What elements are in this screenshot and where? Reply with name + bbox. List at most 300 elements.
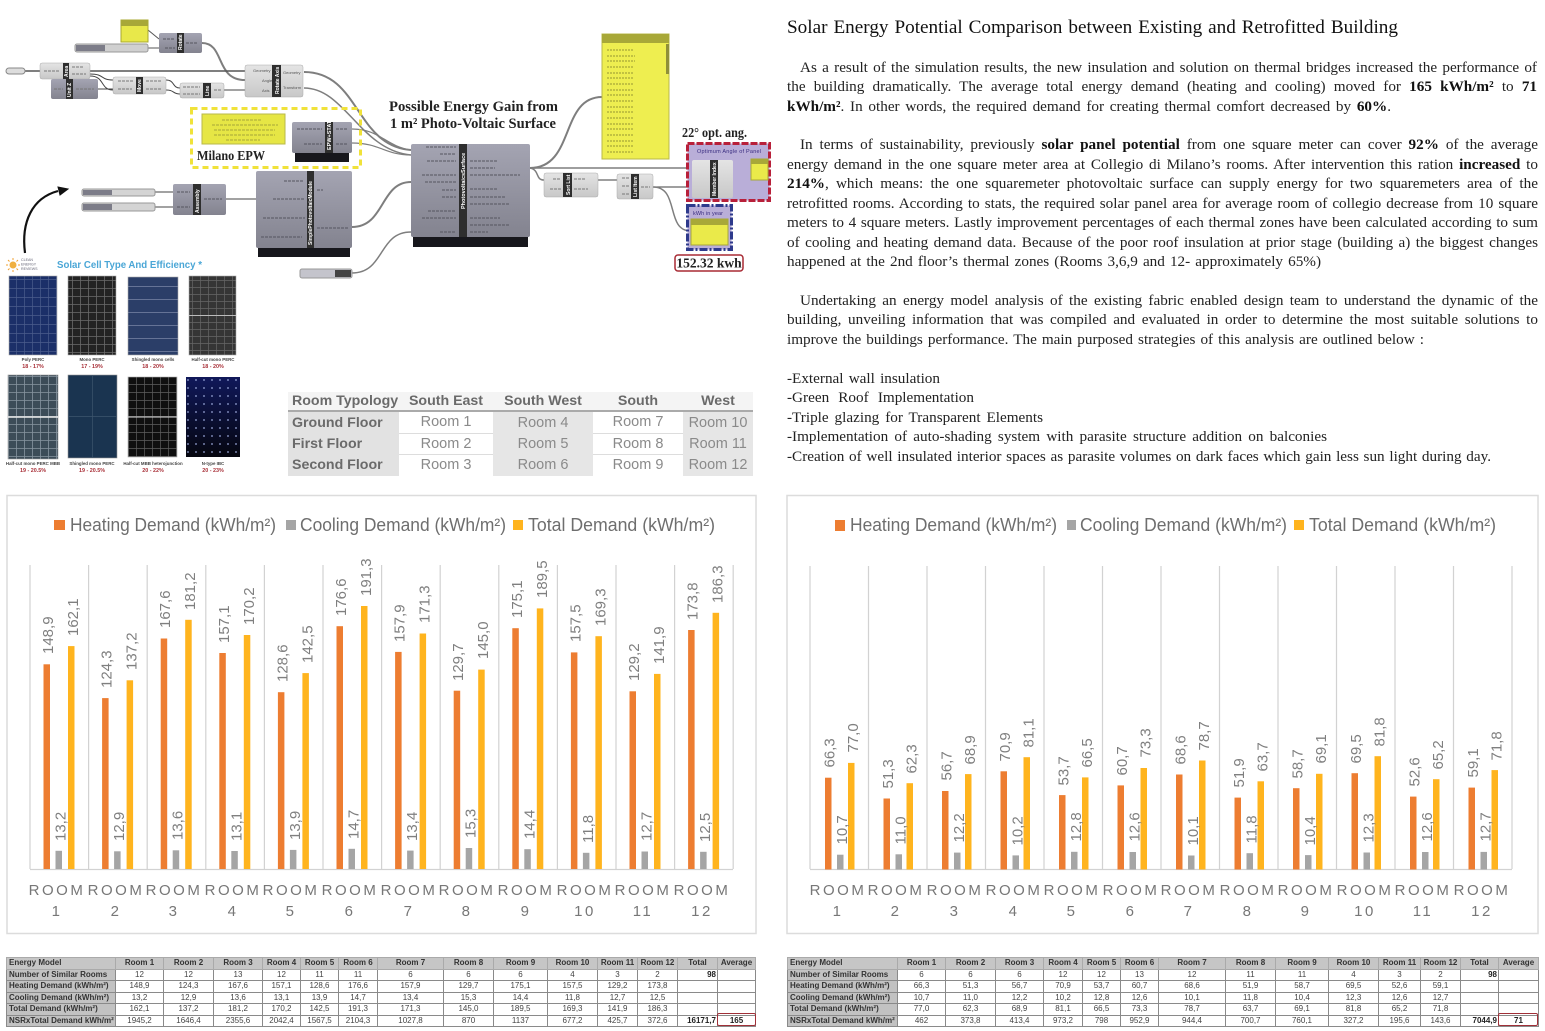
- room typology table: Room Typology: [292, 393, 398, 409]
- bar chart rooms: 162,1: [65, 598, 82, 636]
- table: retrofitted building energy model: 373,8: [960, 1016, 981, 1025]
- room typology table: Room 10: [689, 414, 747, 430]
- bar chart rooms: 175,1: [509, 580, 526, 618]
- bar chart rooms: 70,9: [997, 732, 1014, 762]
- bar chart rooms: 10,1: [1185, 816, 1202, 846]
- room typology table: Room 1: [421, 414, 471, 430]
- bar chart rooms: 12,6: [1419, 812, 1436, 842]
- table: retrofitted building energy model: 71,8: [1433, 1004, 1448, 1013]
- bar chart rooms: 157,5: [567, 604, 584, 642]
- table: retrofitted building energy model: 12,8: [1094, 993, 1109, 1002]
- bar chart rooms: 11,8: [1244, 815, 1260, 844]
- table: existing building energy model: 11,8: [565, 993, 580, 1002]
- bar chart rooms: 148,9: [40, 616, 57, 654]
- table: existing building energy model: 165: [730, 1016, 743, 1025]
- table: retrofitted building energy model: 69,1: [1294, 1004, 1310, 1013]
- table: existing building energy model: 372,6: [647, 1016, 668, 1025]
- logo: clean energy reviews: ENERGY: [21, 262, 37, 266]
- bar chart rooms: 12,3: [1360, 813, 1378, 842]
- table: retrofitted building energy model: Room 9: [1287, 958, 1317, 967]
- room axis labels: ROOM: [146, 882, 202, 899]
- component: sort and list item: Sort List: [566, 174, 572, 195]
- callout: 152.32 kwh: 152.32 kwh: [676, 256, 742, 270]
- table: existing building energy model: 124,3: [178, 981, 199, 990]
- table: retrofitted building energy model: 413,4: [1009, 1016, 1030, 1025]
- table: existing building energy model: 2042,4: [269, 1016, 294, 1025]
- bar chart rooms: 12,2: [951, 813, 968, 842]
- table: existing building energy model: 137,2: [178, 1004, 199, 1013]
- text block: solar energy comparison: 214%, which means: the one squaremeter photovoltaic surface can supply energy for two squaremeters area of the: [787, 175, 1538, 192]
- group: Milano EPW: EPW+STAT: [327, 120, 333, 150]
- logo: clean energy reviews: [6, 258, 38, 272]
- table: existing building energy model: 13,4: [403, 993, 418, 1002]
- bar chart rooms: [822, 717, 1506, 870]
- room axis labels: 4: [228, 903, 238, 920]
- room axis labels: 7: [1184, 903, 1194, 920]
- bar chart rooms: 173,8: [685, 582, 702, 620]
- group: optimum angle of panel: Optimum Angle of Panel: [697, 149, 761, 155]
- table: retrofitted building energy model: 68,6: [1184, 981, 1200, 990]
- room axis labels: 4: [1009, 903, 1019, 920]
- component: photovoltaic module: [256, 171, 352, 278]
- chart legend: Heating Demand (kWh/m²): [70, 515, 276, 535]
- bar chart rooms: 12,8: [1068, 812, 1085, 842]
- highlight: average 71: [1498, 1013, 1538, 1026]
- table: retrofitted building energy model: 51,9: [1243, 981, 1258, 990]
- table: existing building energy model: 148,9: [129, 981, 150, 990]
- table: existing building energy model: 1945,2: [127, 1016, 152, 1025]
- table: existing building energy model: 13,6: [230, 993, 246, 1002]
- table: retrofitted building energy model: 10,1: [1184, 993, 1200, 1002]
- table: existing building energy model: 128,6: [309, 981, 330, 990]
- bar chart rooms: 12,6: [1126, 812, 1144, 842]
- table: retrofitted building energy model: 195,6: [1389, 1016, 1410, 1025]
- room axis labels: 10: [1354, 903, 1376, 920]
- solar panels grid: 17 - 19%: [81, 364, 103, 370]
- bar chart rooms: 51,9: [1231, 758, 1248, 788]
- chart grid lines: [810, 566, 1512, 870]
- text block: solar energy comparison: [787, 17, 1538, 465]
- table: existing building energy model: 14,4: [513, 993, 528, 1002]
- bar chart rooms: 71,8: [1488, 731, 1506, 760]
- component: sort and list item: [544, 173, 653, 199]
- component: sliders and assembly: [82, 184, 226, 215]
- table: retrofitted building energy model: Room 1: [907, 958, 936, 967]
- room axis labels: 5: [1067, 903, 1077, 920]
- group: Milano EPW: [192, 108, 360, 168]
- bar chart rooms: 189,5: [534, 560, 551, 598]
- table: existing building energy model: 145,0: [458, 1004, 479, 1013]
- table: retrofitted building energy model: Room 7: [1177, 958, 1207, 967]
- bar chart rooms: 13,2: [52, 812, 70, 841]
- room axis labels: 9: [521, 903, 531, 920]
- room axis labels: 2: [111, 903, 121, 920]
- solar panels grid: 19 - 20.5%: [20, 468, 46, 474]
- text block: solar energy comparison: -Green Roof Implementation: [787, 389, 974, 406]
- table: retrofitted building energy model: 62,3: [963, 1004, 978, 1013]
- table: retrofitted building energy model: Room 5: [1087, 958, 1116, 967]
- room typology table: Room 8: [613, 436, 663, 452]
- table: retrofitted building energy model: Room 2: [956, 958, 985, 967]
- table: existing building energy model: 176,6: [348, 981, 368, 990]
- table: retrofitted building energy model: 65,2: [1392, 1004, 1407, 1013]
- table: existing building energy model: 1137: [512, 1016, 529, 1025]
- table: existing building energy model: 186,3: [647, 1004, 668, 1013]
- table: existing building energy model: 189,5: [510, 1004, 531, 1013]
- table: retrofitted building energy model: 11,0: [963, 993, 978, 1002]
- table: retrofitted building energy model: Average: [1503, 958, 1534, 967]
- bar chart rooms: 65,2: [1430, 740, 1447, 770]
- table: retrofitted building energy model: 63,7: [1243, 1004, 1258, 1013]
- text block: solar energy comparison: meters to 4 square meters. Lastly improvement percentages of each thermal zones have been calculated according to sum: [787, 214, 1538, 231]
- table: retrofitted building energy model: 4: [1351, 970, 1356, 979]
- table: retrofitted building energy model: 7044,9: [1473, 1016, 1497, 1025]
- room axis labels: ROOM: [205, 882, 261, 899]
- room axis labels: 9: [1301, 903, 1311, 920]
- strategies list: [787, 370, 1491, 465]
- table: existing building energy model: Number of Similar Rooms: [9, 970, 107, 979]
- heading: solar cell type: Solar Cell Type And Efficiency *: [57, 259, 203, 271]
- heading: Solar Energy Potential Comparison between Existing and Retrofitted Building: [787, 17, 1398, 38]
- paragraph 1: [787, 59, 1537, 115]
- component: panel and slider top: [75, 20, 202, 53]
- bar chart rooms: 181,2: [182, 572, 199, 610]
- heading: possible energy gain: Possible Energy Gain from: [389, 99, 558, 115]
- room axis labels: ROOM: [322, 882, 378, 899]
- room axis labels: ROOM: [29, 882, 85, 899]
- logo: clean energy reviews: CLEAN: [21, 258, 33, 262]
- table: existing building energy model: Room 12: [641, 958, 674, 967]
- table: existing building energy model: 870: [462, 1016, 475, 1025]
- room typology table: Second Floor: [292, 457, 383, 473]
- chart legend: Total Demand (kWh/m²): [528, 515, 715, 535]
- table: retrofitted building energy model: 12,6: [1132, 993, 1147, 1002]
- group: optimum angle of panel: [682, 126, 770, 200]
- table: retrofitted building energy model: 69,5: [1346, 981, 1361, 990]
- room axis labels: 12: [691, 903, 713, 920]
- room axis labels: ROOM: [674, 882, 730, 899]
- table: retrofitted building energy model: 6: [919, 970, 924, 979]
- bar chart rooms: 124,3: [99, 650, 116, 688]
- room axis labels: 10: [574, 903, 596, 920]
- arrow: [24, 187, 68, 253]
- bar chart rooms: 13,1: [228, 812, 245, 841]
- table: existing building energy model: Room 3: [223, 958, 253, 967]
- table: retrofitted building energy model: Cooling Demand (kWh/m²): [790, 993, 890, 1002]
- table: existing building energy model: 12,9: [181, 993, 196, 1002]
- room typology table: Room 12: [689, 457, 747, 473]
- table: retrofitted building energy model: 798: [1095, 1016, 1108, 1025]
- table: retrofitted building energy model: 59,1: [1433, 981, 1448, 990]
- room typology table: South East: [409, 393, 483, 409]
- table: existing building energy model: 157,9: [400, 981, 421, 990]
- table: retrofitted building energy model: Room 10: [1337, 958, 1370, 967]
- text block: solar energy comparison: -Triple glazing for Transparent Elements: [787, 409, 1043, 426]
- text block: solar energy comparison: -Creation of well insulated interior spaces as parasite volumes on dark faces which gain less sun light during day.: [787, 448, 1491, 465]
- bar chart rooms: 129,2: [626, 643, 643, 681]
- bar chart rooms: 14,4: [521, 810, 538, 839]
- table: retrofitted building energy model: 12: [1097, 970, 1106, 979]
- table: existing building energy model: 162,1: [129, 1004, 150, 1013]
- chart grid lines: [30, 565, 733, 870]
- panel: retrofitted building chart: [787, 496, 1538, 934]
- solar panels grid: Half-cut mono PERC MBB: [6, 461, 60, 466]
- table: retrofitted building energy model: 81,1: [1055, 1004, 1071, 1013]
- table: retrofitted building energy model: [787, 957, 1539, 1027]
- table: retrofitted building energy model: 11,8: [1243, 993, 1258, 1002]
- room axis labels: ROOM: [381, 882, 437, 899]
- table: existing building energy model: Room 10: [556, 958, 589, 967]
- table: retrofitted building energy model: 58,7: [1294, 981, 1310, 990]
- table: existing building energy model: 11: [354, 970, 362, 979]
- table: existing building energy model: 13,9: [312, 993, 327, 1002]
- solar panels grid: Half-cut MBB heterojunction: [123, 461, 183, 466]
- table: retrofitted building energy model: Room 6: [1125, 958, 1154, 967]
- table: existing building energy model: Room 5: [305, 958, 334, 967]
- table: existing building energy model: Room 4: [267, 958, 296, 967]
- table: retrofitted building energy model: 60,7: [1132, 981, 1147, 990]
- room axis labels: 11: [633, 903, 653, 920]
- room axis labels: ROOM: [1395, 882, 1451, 899]
- table: retrofitted building energy model: 66,3: [914, 981, 929, 990]
- solar panels grid: Shingled mono cells: [132, 357, 175, 362]
- table: existing building energy model: 11: [315, 970, 324, 979]
- chart legend: Total Demand (kWh/m²): [1309, 515, 1496, 535]
- room typology table: South West: [504, 393, 582, 409]
- solar panels grid: 18 - 20%: [142, 364, 164, 370]
- highlight: average 165: [717, 1013, 756, 1026]
- table: retrofitted building energy model: 2: [1438, 970, 1443, 979]
- table: retrofitted building energy model: Energy Model: [790, 958, 842, 967]
- bar chart rooms: 10,4: [1302, 816, 1319, 846]
- bar chart rooms: 68,9: [962, 735, 979, 764]
- table: retrofitted building energy model: 143,6: [1430, 1016, 1451, 1025]
- bar chart rooms: 171,3: [417, 585, 434, 623]
- bar chart rooms: 167,6: [157, 590, 174, 628]
- table: retrofitted building energy model: 327,2: [1343, 1016, 1364, 1025]
- bar chart rooms: 73,3: [1138, 728, 1154, 758]
- table: existing building energy model: Cooling Demand (kWh/m²): [9, 993, 109, 1002]
- table: existing building energy model: 13,1: [274, 993, 289, 1002]
- bar chart rooms: 157,9: [392, 604, 409, 642]
- table: retrofitted building energy model: 68,9: [1012, 1004, 1027, 1013]
- room typology table: Room 2: [421, 436, 471, 452]
- component: sliders and assembly: Assembly: [195, 189, 201, 213]
- table: retrofitted building energy model: Total Demand (kWh/m²): [790, 1004, 879, 1013]
- table: existing building energy model: 1027,8: [398, 1016, 423, 1025]
- component: area, unit and move chain: Line: [205, 86, 211, 96]
- text block: solar energy comparison: -External wall insulation: [787, 370, 940, 387]
- solar panels grid: 19 - 20.5%: [79, 468, 105, 474]
- component: area, unit and move chain: Rotate Axis: [275, 66, 281, 94]
- table: retrofitted building energy model: 81,8: [1346, 1004, 1361, 1013]
- room axis labels: 5: [286, 903, 296, 920]
- component: photovoltaic module: SimplePhotovoltaicModule: [308, 181, 314, 245]
- table: existing building energy model: 6: [518, 970, 523, 979]
- table: existing building energy model: Average: [721, 958, 752, 967]
- bar chart rooms: 170,2: [241, 587, 258, 625]
- room axis labels: ROOM: [1278, 882, 1334, 899]
- table: retrofitted building energy model: 12,7: [1433, 993, 1448, 1002]
- table: retrofitted building energy model: Total: [1470, 958, 1489, 967]
- table: existing building energy model: Energy Model: [9, 958, 61, 967]
- bar chart rooms: 78,7: [1196, 721, 1213, 750]
- room axis labels: ROOM: [615, 882, 671, 899]
- bar chart rooms: 51,3: [880, 759, 897, 788]
- text block: solar energy comparison: Undertaking an energy model analysis of the existing fabric enabled design team to understand the dynamic of the: [800, 292, 1538, 309]
- bar chart rooms: 10,7: [834, 815, 851, 844]
- table: existing building energy model: Room 1: [125, 958, 154, 967]
- bar chart rooms: 137,2: [124, 632, 141, 670]
- room axis labels: 2: [891, 903, 901, 920]
- logo: clean energy reviews: REVIEWS: [21, 267, 38, 271]
- bar chart rooms: 66,5: [1079, 738, 1096, 768]
- bar chart rooms: 141,9: [651, 626, 668, 664]
- table: existing building energy model: 4: [570, 970, 575, 979]
- bar chart rooms: 81,8: [1372, 717, 1388, 746]
- table: existing building energy model: 16171,7: [687, 1016, 716, 1025]
- table: existing building energy model: 13,2: [132, 993, 147, 1002]
- bar chart rooms: 62,3: [904, 744, 920, 774]
- chart legend: Cooling Demand (kWh/m²): [1080, 515, 1287, 535]
- text block: solar energy comparison: As a result of the simulation results, the new insulation and solution on thermal bridges increased the performance of: [800, 59, 1537, 76]
- component: area, unit and move chain: Unit Z: [67, 83, 73, 97]
- room axis labels: ROOM: [1044, 882, 1100, 899]
- bar chart rooms: 10,2: [1010, 816, 1026, 846]
- table: retrofitted building energy model: Room 12: [1424, 958, 1457, 967]
- group: optimum angle of panel: Member Index: [712, 162, 718, 196]
- room axis labels: 1: [52, 903, 62, 920]
- table: retrofitted building energy model: 53,7: [1094, 981, 1109, 990]
- table: existing building energy model: NSRxTotal Demand kWh/m²: [9, 1016, 114, 1025]
- text block: solar energy comparison: building, unveiling information that was compiled and evaluated in order to determine the most suitable solutions to: [787, 311, 1538, 328]
- table: retrofitted building energy model: NSRxTotal Demand kWh/m²: [790, 1016, 895, 1025]
- table: retrofitted building energy model: 56,7: [1012, 981, 1027, 990]
- bar chart rooms: 69,1: [1313, 734, 1330, 764]
- table: retrofitted building energy model: 66,5: [1094, 1004, 1109, 1013]
- table: retrofitted building energy model: 71: [1514, 1016, 1523, 1025]
- chart legend: [835, 515, 1496, 535]
- bar chart rooms: 12,7: [638, 812, 656, 841]
- room typology table: Room 7: [613, 414, 663, 430]
- component: panel and slider top: Rotate: [178, 34, 184, 50]
- table: existing building energy model: 157,1: [271, 981, 292, 990]
- room typology table: Room 3: [421, 457, 471, 473]
- table: retrofitted building energy model: 12,2: [1012, 993, 1027, 1002]
- table: retrofitted building energy model: 760,1: [1292, 1016, 1312, 1025]
- table: existing building energy model: 2104,3: [346, 1016, 370, 1025]
- component: photovoltaics surface: [411, 144, 530, 247]
- table: existing building energy model: 3: [615, 970, 620, 979]
- text block: solar energy comparison: In terms of sustainability, previously solar panel potential from one square meter can cover 92% of the average: [800, 136, 1538, 153]
- table: retrofitted building energy model: 13: [1135, 970, 1144, 979]
- heading: possible energy gain: 1 m² Photo-Voltaic Surface: [390, 116, 556, 132]
- bar chart rooms: 13,9: [287, 811, 304, 840]
- table: existing building energy model: 6: [408, 970, 413, 979]
- room axis labels: ROOM: [263, 882, 319, 899]
- room axis labels: [29, 882, 730, 920]
- text block: solar energy comparison: -Implementation of auto-shading system with parasite structure addition on balconies: [787, 428, 1327, 445]
- table: existing building energy model: 170,2: [271, 1004, 292, 1013]
- table: retrofitted building energy model: Room 8: [1236, 958, 1265, 967]
- room axis labels: ROOM: [498, 882, 554, 899]
- table: existing building energy model: [6, 957, 756, 1027]
- bar chart rooms: 15,3: [463, 809, 480, 838]
- table: existing building energy model: 141,9: [607, 1004, 628, 1013]
- table: existing building energy model: 12,7: [610, 993, 625, 1002]
- text block: solar energy comparison: retrofitted rooms. According to stats, the required solar panel area for average room of collegio decrease from 10 square: [787, 195, 1538, 212]
- bar chart rooms: 11,8: [580, 815, 597, 843]
- table: existing building energy model: 6: [466, 970, 471, 979]
- table: retrofitted building energy model: 12: [1188, 970, 1196, 979]
- bar chart rooms: 81,1: [1020, 718, 1038, 748]
- table: existing building energy model: 2355,6: [226, 1016, 250, 1025]
- table: retrofitted building energy model: 12,6: [1392, 993, 1407, 1002]
- table: existing building energy model: Total Demand (kWh/m²): [9, 1004, 98, 1013]
- component: sort and list item: List Item: [633, 176, 639, 197]
- table: retrofitted building energy model: 10,7: [914, 993, 929, 1002]
- bar chart rooms: 58,7: [1290, 749, 1306, 778]
- table: existing building energy model: Room 7: [396, 958, 425, 967]
- table: existing building energy model: 129,2: [607, 981, 628, 990]
- room axis labels: 3: [169, 903, 179, 920]
- room axis labels: ROOM: [927, 882, 983, 899]
- bar chart rooms: 186,3: [710, 565, 727, 603]
- room axis labels: ROOM: [557, 882, 613, 899]
- room axis labels: ROOM: [439, 882, 495, 899]
- room axis labels: 8: [1243, 903, 1253, 920]
- bar chart rooms: 11,0: [892, 816, 910, 844]
- solar panels grid: Mono PERC: [79, 357, 105, 362]
- table: existing building energy model: 171,3: [400, 1004, 421, 1013]
- room axis labels: 7: [404, 903, 414, 920]
- table: retrofitted building energy model: 12,3: [1346, 993, 1361, 1002]
- table: existing building energy model: 98: [707, 970, 716, 979]
- component: area, unit and move chain: Angle: [262, 78, 273, 83]
- room axis labels: ROOM: [1161, 882, 1217, 899]
- room axis labels: ROOM: [1454, 882, 1510, 899]
- room typology table: [288, 392, 753, 476]
- component: area, unit and move chain: Geometry: [283, 70, 301, 75]
- bar chart rooms: 157,1: [216, 605, 233, 643]
- room axis labels: ROOM: [986, 882, 1042, 899]
- bar chart rooms: 13,4: [404, 812, 421, 841]
- table: existing building energy model: 12: [135, 970, 144, 979]
- table: existing building energy model: 15,3: [461, 993, 476, 1002]
- solar panels grid: 20 - 23%: [202, 468, 224, 474]
- room typology table: Ground Floor: [292, 414, 383, 430]
- table: retrofitted building energy model: 12: [1059, 970, 1067, 979]
- table: retrofitted building energy model: 462: [915, 1016, 928, 1025]
- table: existing building energy model: 13: [234, 970, 242, 979]
- bar chart rooms: 52,6: [1406, 757, 1424, 786]
- table: retrofitted building energy model: 10,4: [1294, 993, 1310, 1002]
- group: kWh in year: [688, 206, 732, 250]
- bar chart rooms: 128,6: [274, 644, 291, 682]
- table: retrofitted building energy model: 10,2: [1055, 993, 1071, 1002]
- bar chart rooms: 63,7: [1254, 742, 1272, 772]
- table: existing building energy model: Room 8: [454, 958, 483, 967]
- table: retrofitted building energy model: 11: [1246, 970, 1255, 979]
- component: area, unit and move chain: Area: [64, 66, 70, 77]
- paragraph 2: [787, 136, 1538, 270]
- bar chart rooms: 145,0: [475, 621, 492, 659]
- table: existing building energy model: Room 9: [506, 958, 535, 967]
- table: retrofitted building energy model: 77,0: [914, 1004, 929, 1013]
- room axis labels: ROOM: [1220, 882, 1276, 899]
- table: existing building energy model: 677,2: [562, 1016, 583, 1025]
- table: retrofitted building energy model: 944,4: [1182, 1016, 1202, 1025]
